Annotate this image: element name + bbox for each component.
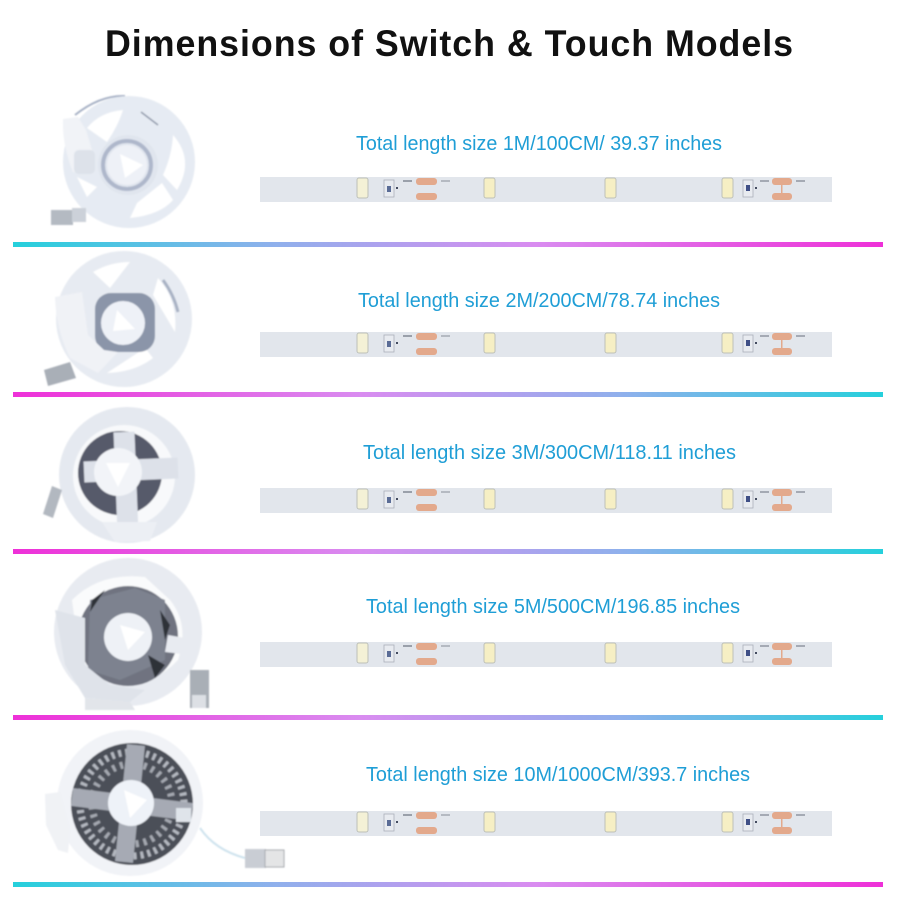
LED strip 3M [260,488,832,513]
gradient divider 3 [13,549,883,554]
LED strip 5M [260,642,832,667]
gradient divider 2 [13,392,883,397]
gradient divider 5 [13,882,883,887]
LED strip 10M [260,811,832,836]
label: 3M length: Total length size 3M/300CM/118.11 inches [363,442,736,464]
gradient divider 1 [13,242,883,247]
title: Dimensions of Switch & Touch Models [105,23,794,64]
label: 5M length: Total length size 5M/500CM/196.85 inches [366,596,740,618]
label: 2M length: Total length size 2M/200CM/78.74 inches [358,290,720,312]
LED strip 2M [260,332,832,357]
reel 1M [51,96,195,228]
reel 3M [43,407,195,543]
reel 10M [45,730,284,876]
gradient divider 4 [13,715,883,720]
label: 10M length: Total length size 10M/1000CM/393.7 inches [366,764,750,786]
reel 5M [54,558,209,710]
reel 2M [44,251,192,387]
LED strip 1M [260,177,832,202]
label: 1M length: Total length size 1M/100CM/ 39.37 inches [356,133,722,155]
